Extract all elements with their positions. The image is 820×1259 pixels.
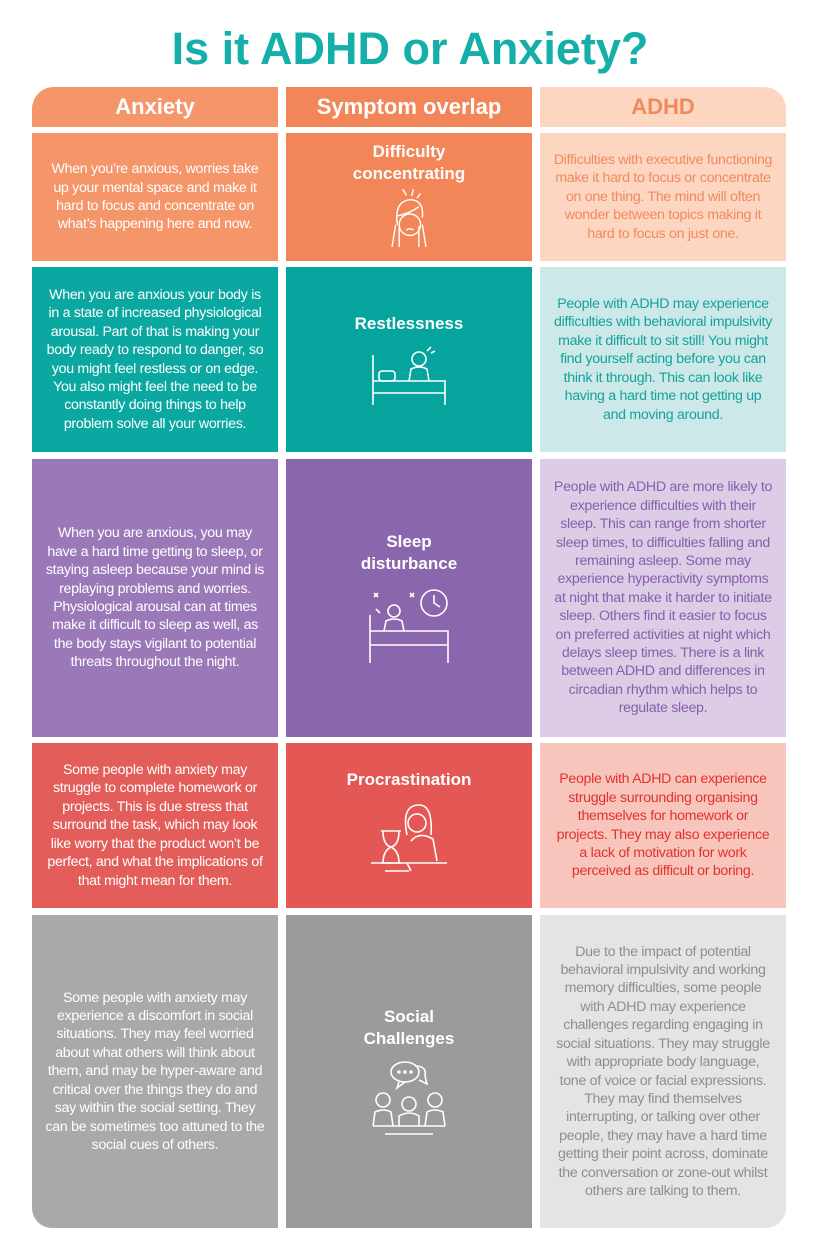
icon: stressed head [391,189,427,247]
row5 anxiety text [32,915,278,1228]
row1 overlap: Difficulty concentrating [286,133,532,261]
row3 overlap: Sleep disturbance: Sleep [386,532,432,551]
row2 ADHD text [540,267,786,452]
header: Symptom overlap [286,87,532,127]
header: Anxiety: Anxiety [115,94,195,119]
row4 anxiety text [32,743,278,908]
row3 anxiety text [32,459,278,737]
row1 anxiety text [32,133,278,261]
row5 anxiety text: Some people with anxiety may experience a discomfort in social situations. They may feel worried about what others will think about them, and may be hyper-aware and critical over the things they do and say within the social setting. They can be sometimes too attuned to the social cues of others. [45,990,264,1153]
row2 overlap: Restlessness: Restlessness [355,314,463,332]
row4 anxiety text: Some people with anxiety may struggle to complete homework or projects. This is due stress that surround the task, which may look like worry that the product won’t be perfect, and what the implications of that might mean for them. [47,762,263,889]
row5 ADHD text: Due to the impact of potential behavioral impulsivity and working memory difficulties, some people with ADHD may experience challenges regarding engaging in social situations. They may struggle with appropriate body language, tone of voice or facial expressions. They may find themselves interrupting, or talking over other people, they may have a hard time getting their point across, dominate the conversation or zone-out whilst others are talking to them. [556,944,770,1199]
row4 ADHD text [540,743,786,908]
icon: person on bed [372,346,446,405]
row4 ADHD text: People with ADHD can experience struggle surrounding organising themselves for homework or projects. They may also experience a lack of motivation for work perceived as difficult or boring. [557,771,769,879]
icon: hourglass and person [371,804,447,872]
icon: sleepless in bed [369,589,449,663]
row1 anxiety text: When you’re anxious, worries take up your mental space and make it hard to focus and concentrate on what’s happening here and now. [52,161,258,232]
header: ADHD [540,87,786,127]
row4 overlap: Procrastination: Procrastination [347,770,471,789]
row3 anxiety text: When you are anxious, you may have a hard time getting to sleep, or staying asleep because your mind is replaying problems and worries. Physiological arousal can at times make it difficult to sleep as well, as the body stays vigilant to potential threats throughout the night. [46,525,264,670]
row3 ADHD text: People with ADHD are more likely to experience difficulties with their sleep. This can range from shorter sleep times, to difficulties falling and remaining asleep. Some may experience hyperactivity symptoms at night that make it harder to initiate sleep. Others find it easier to focus on preferred activities at night which delays sleep times. There is a link between ADHD and differences in circadian rhythm which helps to regulate sleep. [554,479,772,716]
row2 anxiety text: When you are anxious your body is in a state of increased physiological arousal. Part of that is making your body ready to respond to danger, so you might feel restless or on edge. You also might feel the need to be constantly doing things to help problem solve all your worries. [47,287,263,432]
row5 overlap: Social Challenges: Social [384,1006,434,1026]
row2 ADHD text: People with ADHD may experience difficulties with behavioral impulsivity make it difficult to sit still! You might find yourself acting before you can think it through. This can look like having a hard time not getting up and moving around. [554,296,772,423]
row1 ADHD text: Difficulties with executive functioning make it hard to focus or concentrate on one thing. The mind will often wonder between topics making it hard to focus on just one. [554,152,772,242]
title: Is it ADHD or Anxiety? [172,23,648,74]
row2 overlap: Restlessness [286,267,532,452]
header: Anxiety [32,87,278,127]
row5 overlap: Social Challenges [286,915,532,1228]
header: ADHD: ADHD [631,94,695,119]
row2 anxiety text [32,267,278,452]
icon: group conversation [372,1061,446,1135]
row5 overlap: Social Challenges: Challenges [364,1028,454,1048]
row3 overlap: Sleep disturbance [286,459,532,737]
row4 overlap: Procrastination [286,743,532,908]
row1 overlap: Difficulty concentrating: concentrating [353,164,465,183]
header: Symptom overlap: Symptom overlap [317,94,501,119]
row1 ADHD text [540,133,786,261]
row3 overlap: Sleep disturbance: disturbance [361,554,457,573]
row1 overlap: Difficulty concentrating: Difficulty [373,142,445,161]
